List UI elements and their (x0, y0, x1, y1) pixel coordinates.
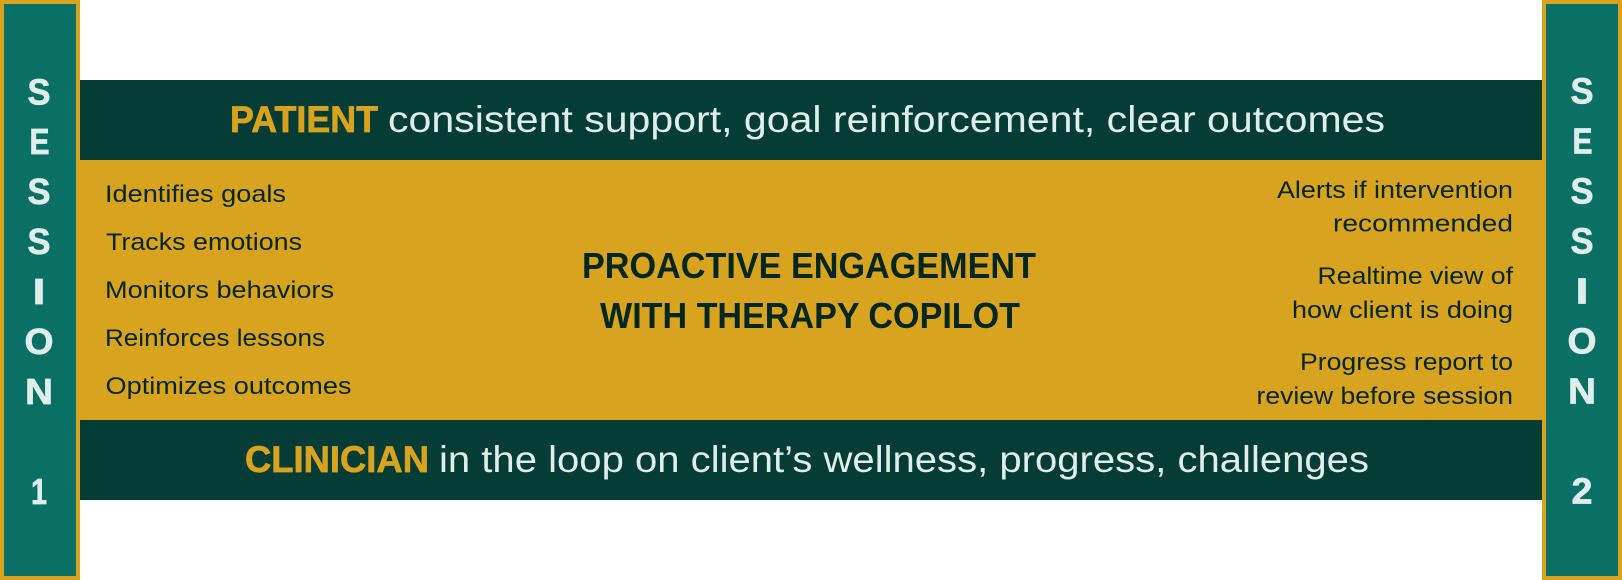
panel: session 2 sidebar (1544, 2, 1620, 578)
list: session 1 benefits: Reinforces lessons (105, 325, 325, 352)
panel: central gold band (80, 160, 1542, 420)
panel: session 1 sidebar (2, 2, 78, 578)
heading: proactive engagement: PROACTIVE ENGAGEMENT (582, 245, 1036, 286)
panel: session 1 sidebar: 1 (31, 471, 47, 512)
panel: clinician banner (80, 420, 1542, 500)
panel: session 2 sidebar: I (1576, 270, 1588, 312)
panel: patient banner: PATIENT (230, 99, 378, 140)
list: session 1 benefits: Identifies goals (105, 181, 286, 208)
list: session 2 clinician features: recommended (1333, 210, 1513, 238)
list: session 2 clinician features: how client is doing (1292, 297, 1513, 324)
list: session 1 benefits (105, 181, 352, 400)
list: session 1 benefits: Tracks emotions (106, 229, 302, 256)
panel: session 2 sidebar: N (1568, 370, 1596, 412)
panel: session 2 sidebar: S (1570, 220, 1594, 262)
panel: session 2 sidebar: 2 (1572, 470, 1592, 512)
list: session 2 clinician features (1256, 177, 1513, 410)
panel: session 1 sidebar: I (32, 271, 46, 312)
heading: proactive engagement (582, 245, 1036, 336)
list: session 1 benefits: Optimizes outcomes (106, 373, 352, 400)
list: session 1 benefits: Monitors behaviors (105, 277, 334, 304)
list: session 2 clinician features: Alerts if intervention (1277, 177, 1513, 204)
list: session 2 clinician features: Progress report to (1300, 349, 1513, 376)
panel: clinician banner: CLINICIAN (245, 439, 429, 480)
panel: session 1 sidebar: S (28, 221, 50, 262)
panel: session 2 sidebar: S (1570, 170, 1594, 212)
panel: session 1 sidebar: E (30, 121, 50, 162)
panel: session 1 sidebar: N (25, 371, 53, 412)
panel: clinician banner: in the loop on client’s wellness, progress, challenges (439, 439, 1369, 480)
panel: patient banner (80, 80, 1542, 160)
panel: patient banner: consistent support, goal reinforcement, clear outcomes (388, 99, 1385, 140)
panel: session 1 sidebar: O (24, 321, 54, 362)
heading: proactive engagement: WITH THERAPY COPILOT (600, 295, 1020, 336)
panel: session 1 sidebar: S (28, 72, 50, 112)
panel: session 2 sidebar: O (1568, 320, 1596, 362)
list: session 2 clinician features: review before session (1256, 383, 1513, 410)
panel: session 2 sidebar: S (1570, 70, 1594, 112)
list: session 2 clinician features: Realtime view of (1318, 263, 1513, 290)
panel: session 2 sidebar: E (1572, 120, 1592, 162)
panel: session 1 sidebar: S (28, 171, 50, 212)
